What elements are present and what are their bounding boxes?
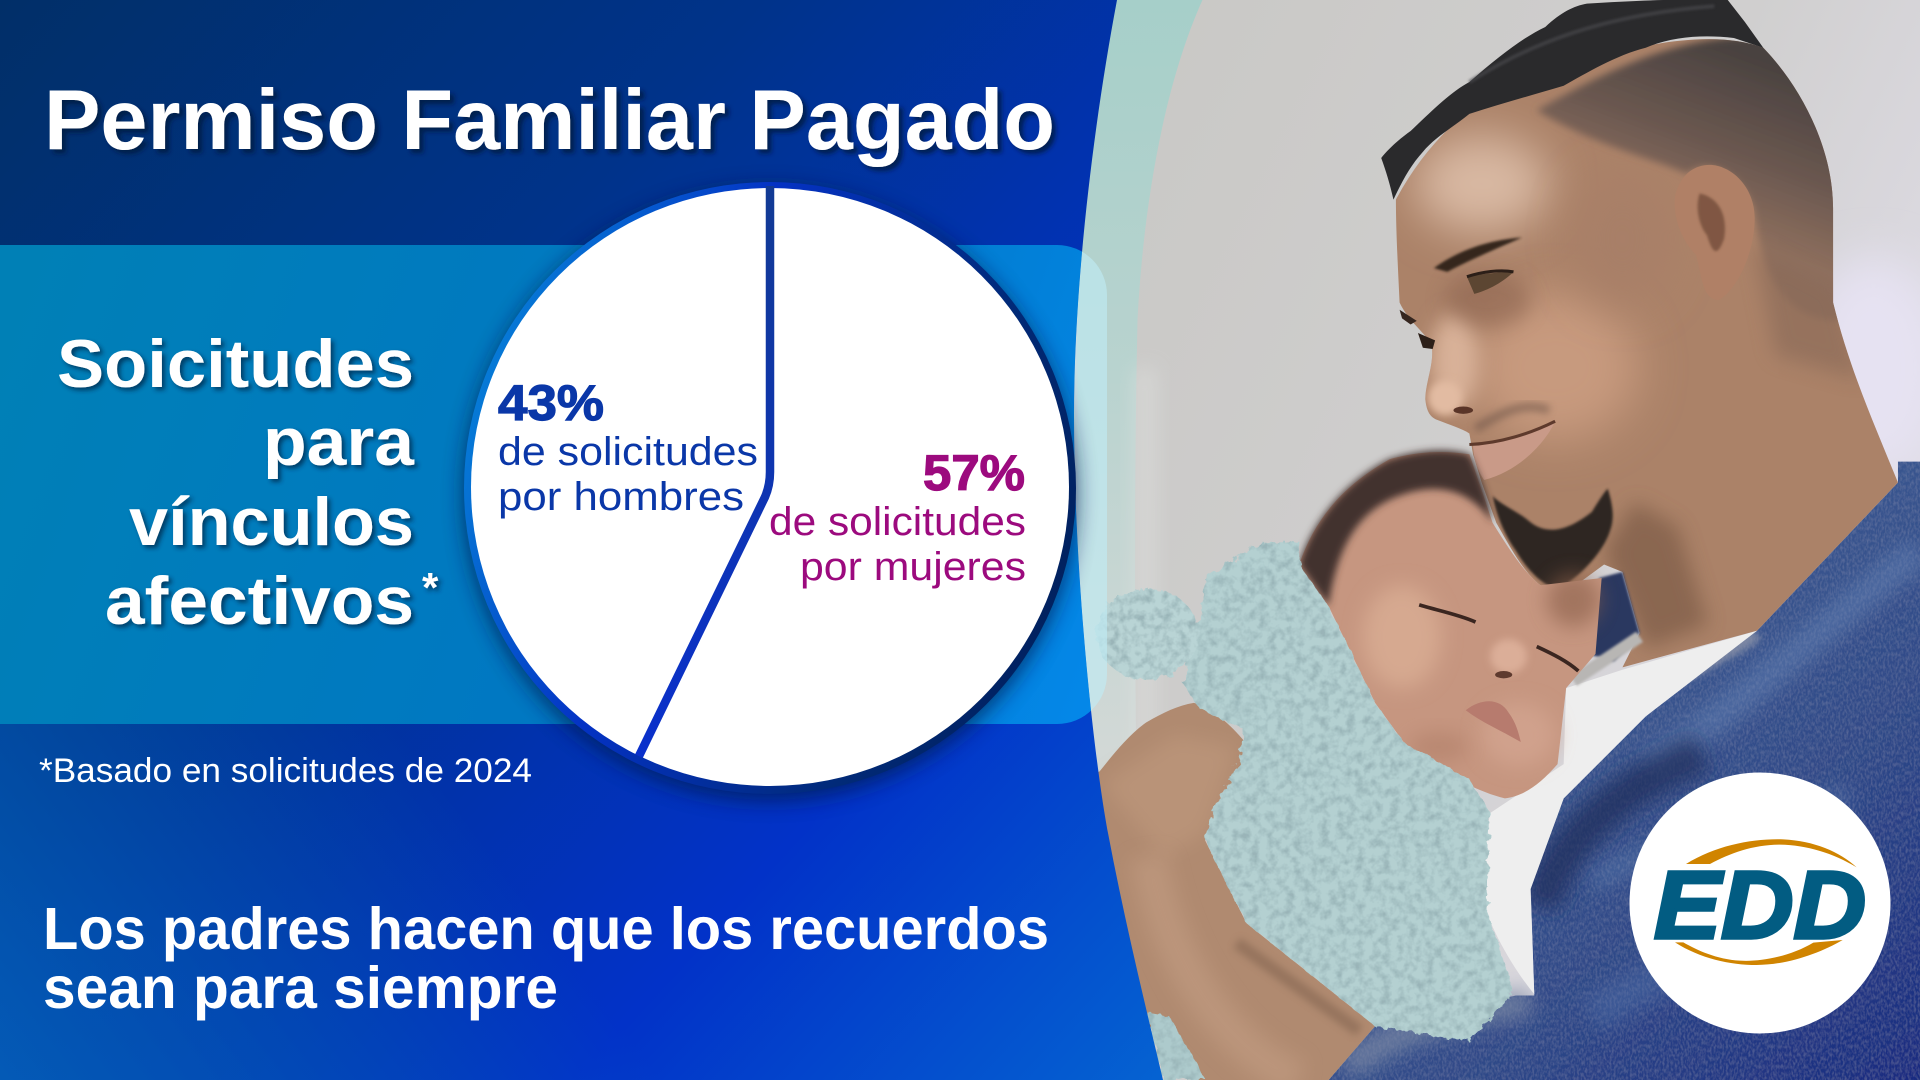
blanket: pom-pom ear <box>1096 589 1199 680</box>
nostril <box>1453 407 1473 414</box>
label: 57 percent women <box>769 445 1026 589</box>
white t-shirt <box>1482 631 1757 994</box>
smile <box>1473 421 1555 480</box>
heading: solicitudes para vinculos afectivos: * <box>422 564 439 611</box>
heading: solicitudes para vinculos afectivos <box>57 326 439 639</box>
heading: solicitudes para vinculos afectivos: vínculos <box>129 484 414 560</box>
label: 43 percent men: por hombres <box>498 475 744 519</box>
baby nose <box>1490 639 1527 673</box>
man's head and neck <box>1381 0 1898 667</box>
blanket: fleece hood and body <box>1182 541 1513 1041</box>
baby head <box>1299 451 1602 798</box>
man's jacket <box>1329 462 1920 1080</box>
baby eyes <box>1419 605 1476 622</box>
title: Permiso Familiar Pagado <box>44 73 1055 168</box>
eye <box>1467 272 1513 294</box>
panel: blue background shape <box>0 0 1163 1080</box>
tagline <box>43 896 1049 1021</box>
label: 57 percent women: de solicitudes <box>769 500 1026 544</box>
arm and hand <box>1071 703 1375 1080</box>
label: 43 percent men <box>498 375 758 519</box>
goatee <box>1493 489 1613 589</box>
footnote: *Basado en solicitudes de 2024 <box>39 752 532 790</box>
heading: solicitudes para vinculos afectivos: Soicitudes <box>57 326 414 402</box>
label: 43 percent men: de solicitudes <box>498 430 758 474</box>
hair <box>1381 0 1763 200</box>
blanket: bottom strip <box>1147 1013 1206 1080</box>
label: 57 percent women: por mujeres <box>800 545 1026 589</box>
eyebrow <box>1434 238 1522 272</box>
label: 43 percent men: 43% <box>498 375 604 431</box>
logo: EDD <box>1630 772 1890 1034</box>
ear <box>1675 165 1755 300</box>
tagline: sean para siempre <box>43 955 558 1021</box>
baby mouth <box>1466 701 1521 742</box>
label: 57 percent women: 57% <box>923 445 1025 501</box>
dark jacket behind baby <box>1592 572 1640 661</box>
tagline: Los padres hacen que los recuerdos <box>43 896 1049 962</box>
logo arcs <box>1675 839 1857 965</box>
chart: pie of applications by gender <box>464 182 1076 800</box>
baby hair <box>1299 451 1493 606</box>
grey inner collar <box>1573 637 1640 681</box>
photo: father holding sleeping baby <box>1053 0 1920 1080</box>
panel: translucent band <box>0 245 1107 724</box>
pie divider <box>639 186 770 756</box>
heading: solicitudes para vinculos afectivos: afectivos <box>105 563 414 639</box>
logo wordmark: EDD <box>1654 852 1866 959</box>
heading: solicitudes para vinculos afectivos: para <box>263 404 415 480</box>
